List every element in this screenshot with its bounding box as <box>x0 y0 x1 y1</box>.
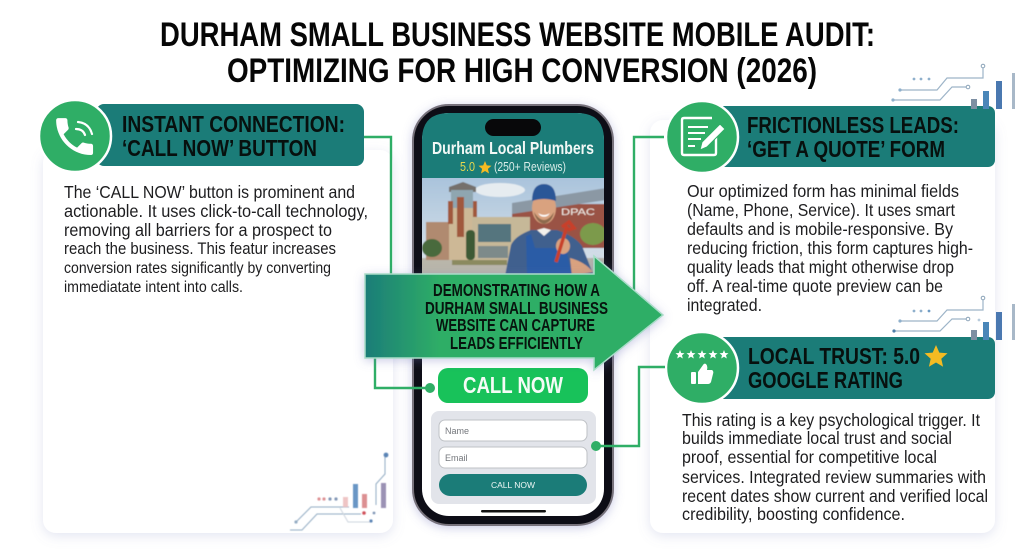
phone mockup <box>413 105 613 525</box>
center arrow callout <box>365 256 663 370</box>
connector: quote form to phone <box>634 137 664 290</box>
body text: This rating is a key psychological trigger. It <box>682 410 980 430</box>
panel: frictionless leads and local trust <box>650 64 1015 533</box>
photo: plumber in front of DPAC <box>420 176 606 276</box>
arrow text: DURHAM SMALL BUSINESS <box>425 298 608 318</box>
lead form <box>431 411 596 504</box>
lead form: CALL NOW <box>491 480 535 490</box>
lead form: Name <box>445 426 469 436</box>
heading bar: FRICTIONLESS LEADS: <box>747 112 959 138</box>
call now button <box>438 368 588 403</box>
body text: (Name, Phone, Service). It uses smart <box>687 200 955 220</box>
arrow text: DEMONSTRATING HOW A <box>433 280 600 300</box>
icon: phone <box>39 100 111 172</box>
heading bar <box>712 337 995 399</box>
body text: proof, essential for competitive local <box>682 447 937 467</box>
body text: The ‘CALL NOW’ button is prominent and <box>64 182 355 202</box>
body text: immediatate intent into calls. <box>64 279 243 296</box>
connector: local trust to form <box>591 367 665 451</box>
title: OPTIMIZING FOR HIGH CONVERSION (2026) <box>227 52 817 90</box>
heading bar <box>96 104 364 166</box>
arrow text: LEADS EFFICIENTLY <box>450 333 583 353</box>
man <box>505 230 594 276</box>
title <box>160 16 875 90</box>
heading bar: ‘GET A QUOTE’ FORM <box>747 136 945 162</box>
body text: credibility, boosting confidence. <box>682 504 905 524</box>
heading bar: INSTANT CONNECTION: <box>122 111 345 137</box>
icon: stars and thumbs up <box>666 332 738 404</box>
decoration: top circuit and bars <box>891 64 1015 109</box>
arrow text: WEBSITE CAN CAPTURE <box>436 315 595 335</box>
body text <box>64 182 368 296</box>
decoration: circuit and bar chart <box>290 453 388 530</box>
phone header <box>422 113 604 178</box>
heading bar: GOOGLE RATING <box>748 367 903 393</box>
decoration: middle circuit and bars <box>892 296 1015 340</box>
body text <box>687 181 973 315</box>
body text: conversion rates significantly by converting <box>64 260 331 277</box>
body text: actionable. It uses click-to-call technology, <box>64 201 368 221</box>
body text: reach the business. This featur increases <box>64 240 336 258</box>
arrow text <box>425 280 608 353</box>
phone header: (250+ Reviews) <box>494 159 566 174</box>
call now button: CALL NOW <box>463 372 563 398</box>
panel: instant connection <box>39 100 393 533</box>
heading bar <box>712 106 995 167</box>
icon: form and pencil <box>666 101 738 173</box>
body text: recent dates show current and verified local <box>682 486 988 506</box>
body text: quality leads that might otherwise drop <box>687 257 954 277</box>
lead form: Email <box>445 453 468 463</box>
body text: builds immediate local trust and social <box>682 428 952 448</box>
body text: off. A real-time quote preview can be <box>687 276 943 296</box>
photo: plumber in front of DPAC: DPAC <box>561 207 595 218</box>
connector: call now panel to phone <box>364 137 435 393</box>
body text: Our optimized form has minimal fields <box>687 181 959 201</box>
body text: services. Integrated review summaries with <box>682 467 986 487</box>
heading bar: LOCAL TRUST: 5.0 <box>748 343 920 369</box>
title: DURHAM SMALL BUSINESS WEBSITE MOBILE AUDIT: <box>160 16 875 54</box>
body text <box>682 410 988 524</box>
heading bar: ‘CALL NOW’ BUTTON <box>122 135 317 161</box>
body text: removing all barriers for a prospect to <box>64 220 332 240</box>
phone header: 5.0 <box>460 159 475 174</box>
body text: defaults and is mobile-responsive. By <box>687 219 953 239</box>
phone header: Durham Local Plumbers <box>432 138 594 158</box>
body text: reducing friction, this form captures high- <box>687 238 973 258</box>
body text: integrated. <box>687 295 762 315</box>
